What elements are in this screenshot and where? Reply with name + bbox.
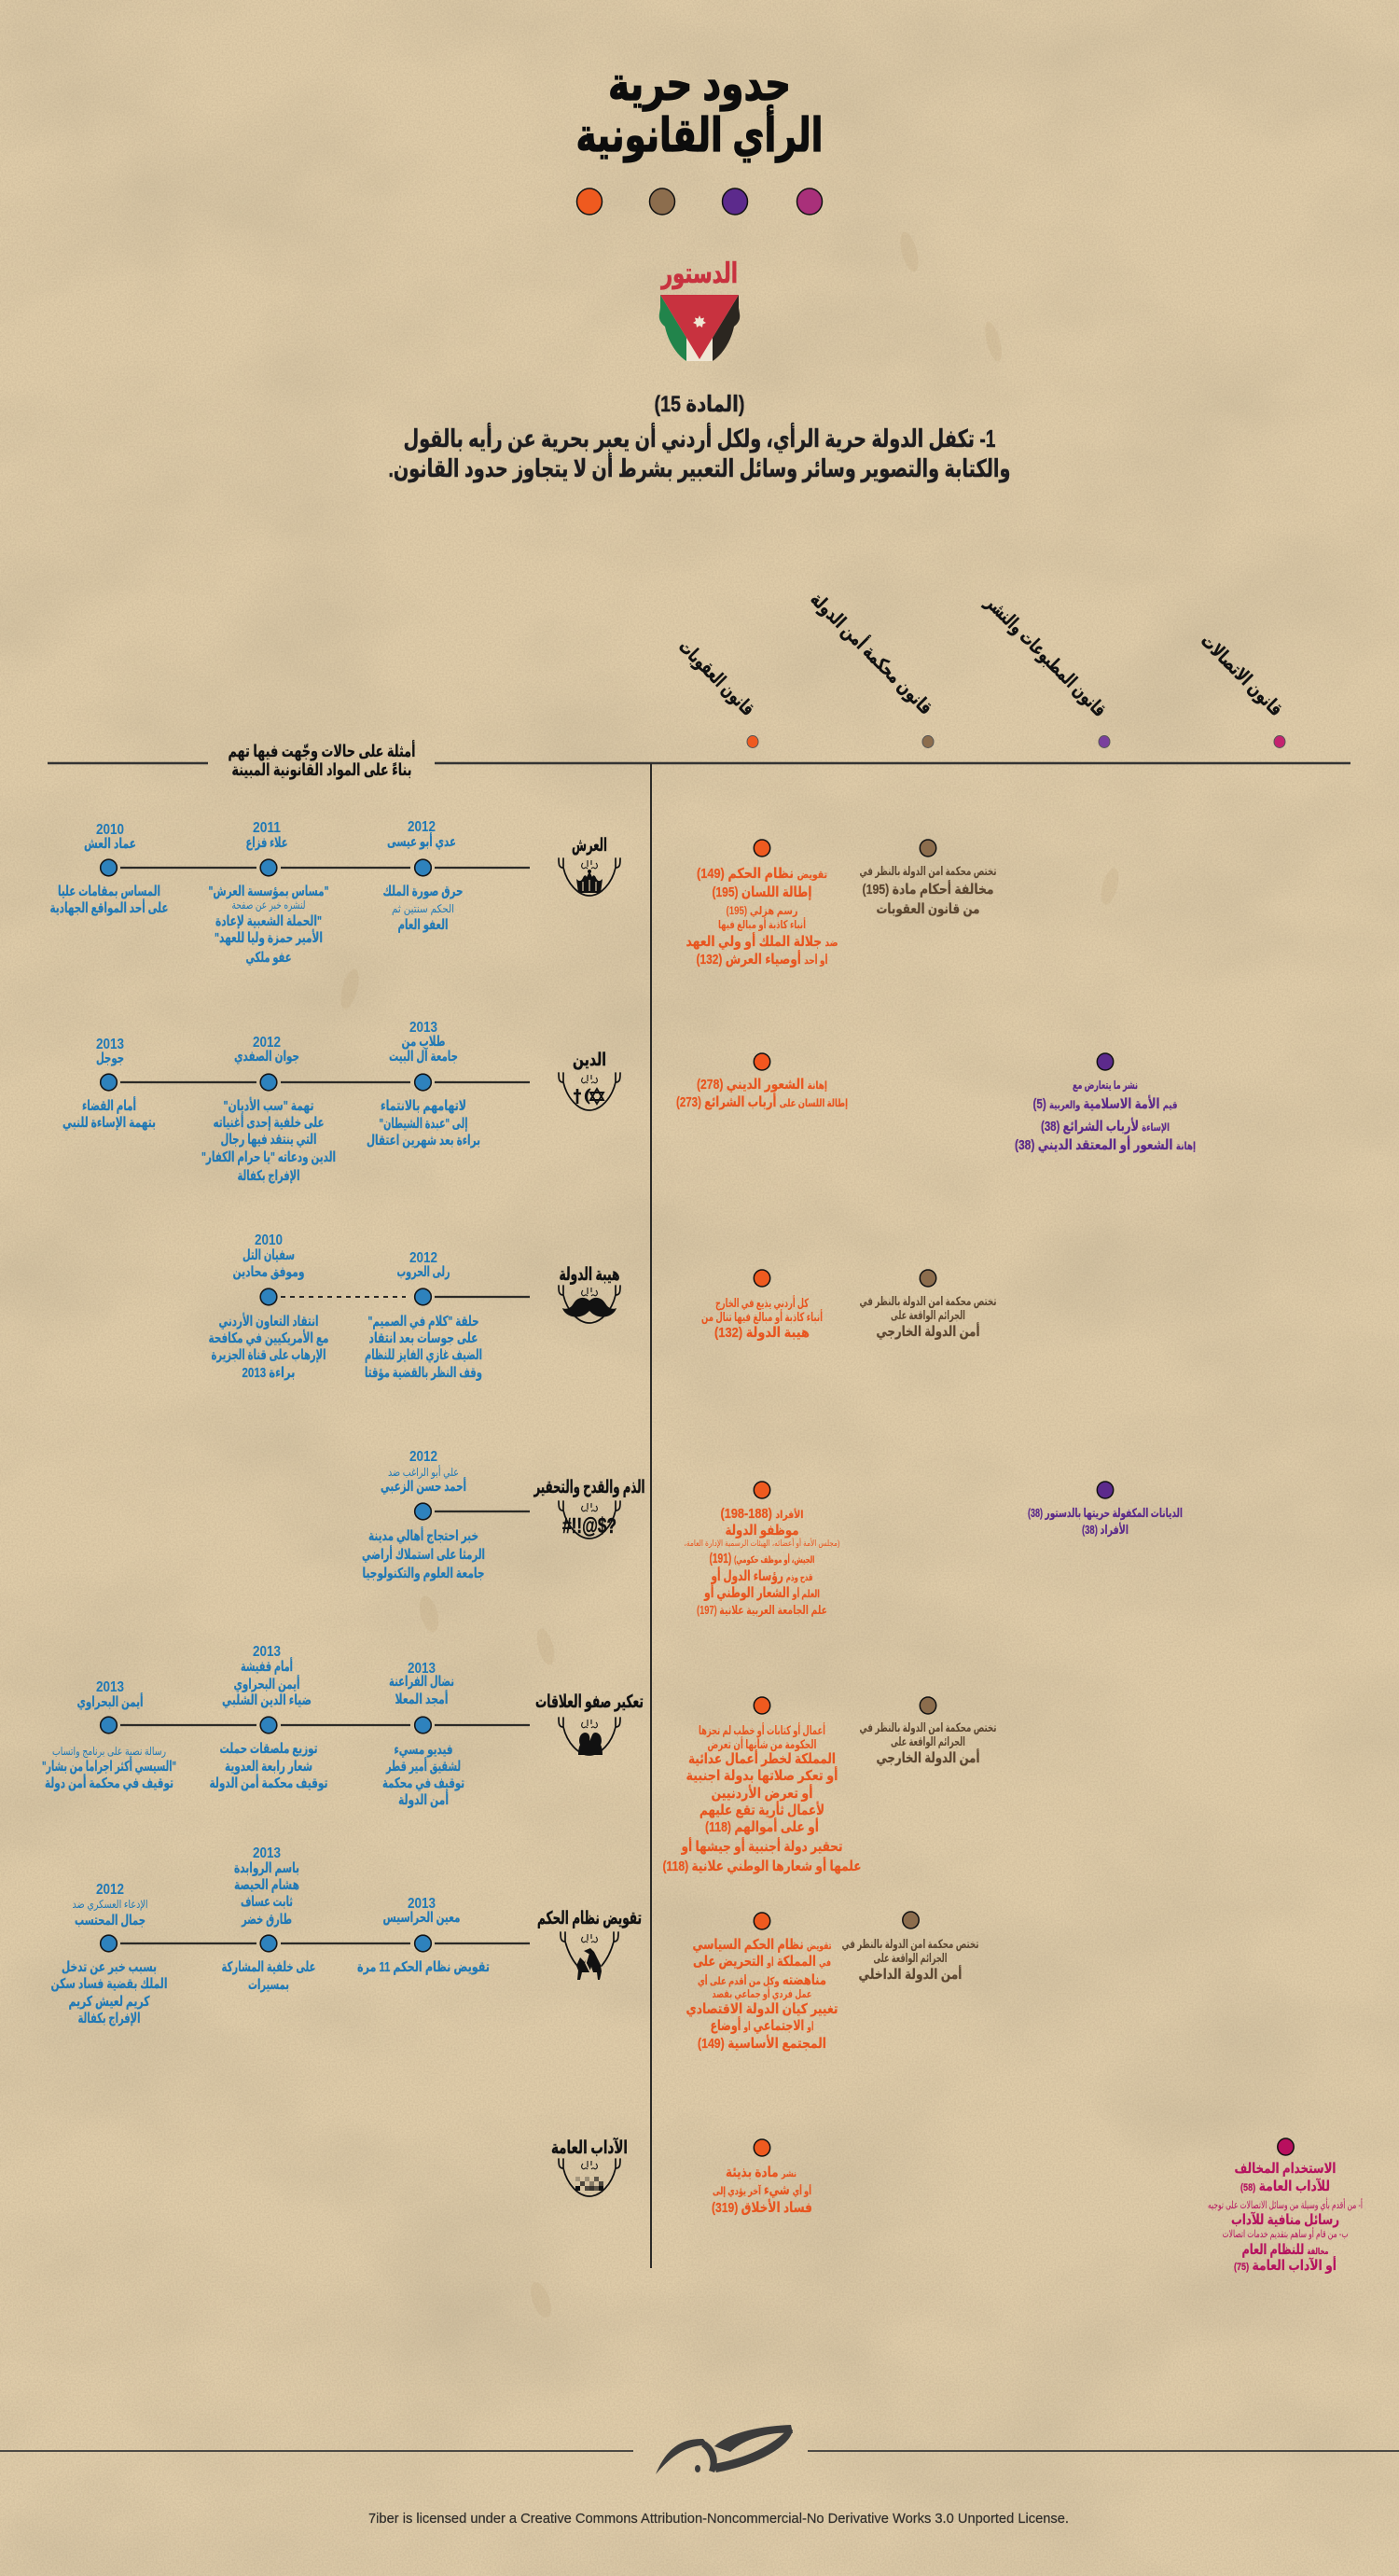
law: penal code on defamation: العلم أو الشعار الوطني أو [703, 1583, 820, 1601]
title [576, 58, 823, 163]
law: state security court on relations [860, 1697, 996, 1766]
case: Qafisha, Bahrawi, Shalabi: أمام قفيشة [241, 1657, 293, 1675]
case: Imad Al-Ash [50, 822, 168, 916]
case: Qafisha, Bahrawi, Shalabi: 2013 [253, 1644, 281, 1660]
icon: face with two silhouettes [559, 1718, 620, 1755]
timeline: undermining the regime [120, 1942, 530, 1944]
press and publications law header: قانون المطبوعات والنشر [981, 592, 1110, 721]
row: the throne [50, 819, 996, 968]
icon: face with pixelated mouth [559, 2159, 620, 2196]
case: Rula Al-Hroob [365, 1250, 482, 1381]
law: penal code on regime: أو الاجتماعي أو أوضاع [711, 2016, 814, 2034]
law: telecom law on morals: رسائل منافية للآداب [1231, 2211, 1339, 2228]
row: disturbing relations [42, 1644, 996, 1874]
examples heading: أمثلة على حالات وجّهت فيها تهم [228, 740, 416, 761]
constitution emblem [659, 258, 740, 361]
row title: religion: الدين [573, 1051, 606, 1070]
case: Sufyan Al-Tal and Muwaffaq Mahadin: مع الأمريكيين في مكافحة [209, 1330, 328, 1346]
case: Sufyan Al-Tal and Muwaffaq Mahadin: الإرهاب على قناة الجزيرة [211, 1347, 326, 1363]
case: Rawabdeh, Haisa, Assaf, Khader: باسم الروابدة [234, 1860, 299, 1876]
case: Google: جوجل [96, 1051, 124, 1066]
article 15 text: (المادة 15) [655, 392, 744, 417]
law: press law on religion: الإساءة لأرباب الشرائع (38) [1041, 1118, 1170, 1135]
law: penal code on throne [686, 840, 838, 968]
law: penal code on relations: الحكومة من شأنها أن تعرض [707, 1736, 817, 1751]
case: Rawabdeh, Haisa, Assaf, Khader: بمسيرات [248, 1977, 289, 1993]
case: Google: 2013 [96, 1037, 124, 1052]
case: Nidal Al-Faraaneh and Amjad Al-Mualla: فيديو مسيء [394, 1742, 453, 1758]
timeline: throne [120, 867, 530, 869]
law: state security court on regime: الجرائم الواقعة على [873, 1951, 948, 1965]
law: penal code on state prestige: كل أردني يذيع في الخارج [715, 1295, 809, 1311]
case: Al al-Bayt students: طلاب من [401, 1034, 446, 1050]
case: Rawabdeh, Haisa, Assaf, Khader: طارق خضر [241, 1912, 292, 1928]
examples heading: بناءً على المواد القانونية المبينة [231, 760, 412, 780]
case: Qafisha, Bahrawi, Shalabi [209, 1644, 328, 1791]
row title: disturbing relations: تعكير صفو العلاقات [535, 1692, 644, 1712]
case: Sufyan Al-Tal and Muwaffaq Mahadin: 2010 [255, 1232, 283, 1248]
case: Al al-Bayt students: جامعة آل البيت [389, 1048, 458, 1065]
law: state security court on throne: من قانون العقوبات [877, 901, 979, 917]
row title: undermining the regime: تقويض نظام الحكم [537, 1909, 642, 1929]
law: penal code on regime: تقويض نظام الحكم السياسي [692, 1937, 832, 1953]
logo: 7iber [656, 2425, 793, 2474]
case: Ahmad Hassan Al-Zoubi: الرمثا على استملاك أراضي [362, 1545, 485, 1563]
law: penal code on religion: إهانة الشعور الديني (278) [697, 1077, 827, 1093]
law: press law on religion: إهانة الشعور أو المعتقد الديني (38) [1015, 1135, 1196, 1153]
row: religion [62, 1020, 1196, 1184]
law: penal code on throne: أو أحد أوصياء العرش (132) [696, 950, 828, 968]
law: state security court on regime: تختص محكمة امن الدولة بالنظر في [841, 1937, 979, 1951]
case: Ayman Al-Bahrawi: توقيف في محكمة أمن دولة [45, 1774, 173, 1791]
case: Sufyan Al-Tal and Muwaffaq Mahadin: براءة 2013 [242, 1365, 295, 1381]
case: Ahmad Hassan Al-Zoubi: علي أبو الراغب ضد [388, 1465, 459, 1480]
case: Nidal Al-Faraaneh and Amjad Al-Mualla: توقيف في محكمة [382, 1775, 464, 1791]
case: Ayman Al-Bahrawi: أيمن البحراوي [76, 1692, 144, 1711]
law: penal code on relations: المملكة لخطر أعمال عدائية [688, 1749, 836, 1767]
law: penal code on religion: إطالة اللسان على أرباب الشرائع (273) [676, 1093, 848, 1110]
case: Jamal Al-Muhtaseb: الملك بقضية فساد سكن [50, 1976, 168, 1992]
law: penal code on relations: أو تعرض الأردنيين [711, 1784, 813, 1802]
timeline: defamation [435, 1511, 530, 1512]
case: Jamal Al-Muhtaseb: الإفراج بكفالة [78, 2011, 140, 2026]
law: state security court on regime [841, 1912, 979, 1983]
case: Ahmad Hassan Al-Zoubi: أحمد حسن الزعبي [381, 1477, 466, 1495]
law: penal code on relations: لأعمال ثأرية تقع عليهم [700, 1801, 824, 1818]
law: penal code on state prestige: أنباء كاذبة أو مبالغ فيها تنال من [701, 1309, 823, 1324]
case: Moeen Al-Harasees: معين الحراسيس [382, 1910, 461, 1926]
law: press law on religion: نشر ما يتعارض مع [1073, 1079, 1138, 1092]
timeline: religion [120, 1081, 530, 1083]
law: penal code on relations: علمها أو شعارها الوطني علانية (118) [662, 1857, 862, 1874]
law: telecom law on morals: ب- من قام أو ساهم بتقديم خدمات اتصالات [1222, 2227, 1349, 2240]
case: Uday Abu Issa: 2012 [408, 819, 436, 835]
case: Alaa Fazzaa: عفو ملكي [246, 950, 291, 966]
law: penal code on state prestige [701, 1270, 823, 1341]
law: state security court on state prestige [860, 1270, 996, 1340]
law: penal code on relations: أو على أموالهم (118) [705, 1817, 819, 1835]
case: Jamal Al-Muhtaseb: 2012 [96, 1882, 124, 1898]
case: Google: بتهمة الإساءة للنبي [62, 1115, 156, 1131]
case: Imad Al-Ash: عماد العش [84, 836, 136, 852]
case: Jowan Safadi [201, 1035, 336, 1184]
case: Nidal Al-Faraaneh and Amjad Al-Mualla: 2013 [408, 1661, 436, 1677]
case: Moeen Al-Harasees: تقويض نظام الحكم 11 مرة [357, 1959, 490, 1975]
case: Jowan Safadi: على خلفية إحدى أغنياته [213, 1113, 325, 1131]
icon: face with broken throne [561, 1932, 618, 1980]
law: penal code on defamation: الأفراد (188-198) [720, 1506, 804, 1522]
law: state security court on state prestige: تختص محكمة امن الدولة بالنظر في [860, 1294, 996, 1308]
case: Sufyan Al-Tal and Muwaffaq Mahadin: انتقاد التعاون الأردني [218, 1313, 319, 1330]
law: penal code on relations [662, 1697, 862, 1874]
case: Jamal Al-Muhtaseb: بسبب خبر عن تدخل [62, 1959, 157, 1975]
law: penal code on relations: تحقير دولة أجنبية أو جيشها أو [681, 1837, 843, 1855]
state security court law header: قانون محكمة أمن الدولة [806, 587, 938, 719]
case: Rula Al-Hroob: وقف النظر بالقضية مؤقتا [365, 1365, 482, 1381]
case: Alaa Fazzaa: الأمير حمزة وليا للعهد" [215, 929, 323, 946]
row title: defamation: الذم والقدح والتحقير [533, 1478, 645, 1497]
case: Jowan Safadi: الدين ودعاته "يا حرام الكفار" [201, 1149, 336, 1165]
law: press law on defamation [1028, 1482, 1183, 1537]
article 15 text: والكتابة والتصوير وسائر وسائل التعبير بشرط أن لا يتجاوز حدود القانون. [388, 453, 1011, 483]
law: penal code on throne: إطالة اللسان (195) [713, 884, 811, 900]
law: penal code on morals [712, 2139, 812, 2216]
law: telecom law on morals: مخالفة للنظام العام [1242, 2242, 1328, 2258]
case: Rula Al-Hroob: 2012 [409, 1250, 437, 1266]
case: Ahmad Hassan Al-Zoubi: خبر احتجاج أهالي مدينة [368, 1526, 478, 1544]
icon: face with moustache [559, 1286, 620, 1323]
law: penal code on throne: تقويض نظام الحكم (149) [697, 866, 827, 882]
law: state security court on state prestige: الجرائم الواقعة على [891, 1308, 965, 1322]
law: penal code on defamation: قدح وذم رؤساء الدول أو [711, 1566, 813, 1584]
case: Alaa Fazzaa: لنشره خبر عن صفحة [231, 898, 306, 912]
case: Ayman Al-Bahrawi: 2013 [96, 1679, 124, 1695]
case: Jamal Al-Muhtaseb: كريم لعيش كريم [69, 1994, 150, 2010]
title: الرأي القانونية [576, 104, 823, 163]
case: Ahmad Hassan Al-Zoubi: جامعة العلوم والتكنولوجيا [362, 1566, 485, 1581]
case: Rawabdeh, Haisa, Assaf, Khader: على خلفية المشاركة [222, 1959, 315, 1975]
icon: face with censored symbols [559, 1501, 620, 1539]
case: Jowan Safadi: تهمة "سب الأديان" [224, 1097, 313, 1114]
law: penal code on throne: رسم هزلي (195) [726, 904, 798, 917]
law: penal code on defamation [685, 1482, 839, 1617]
timeline: state prestige [435, 1296, 530, 1298]
row: undermining the regime [50, 1845, 979, 2052]
case: Uday Abu Issa: حرق صورة الملك [382, 884, 463, 899]
case: Ayman Al-Bahrawi [42, 1679, 176, 1791]
case: Jowan Safadi: 2012 [253, 1035, 281, 1051]
article 15 text: 1- تكفل الدولة حرية الرأي، ولكل أردني أن يعبر بحرية عن رأيه بالقول [403, 423, 996, 453]
case: Rawabdeh, Haisa, Assaf, Khader [222, 1845, 315, 1993]
law: telecom law on morals: للآداب العامة (58) [1240, 2178, 1330, 2194]
law: penal code on relations: أعمال أو كتابات أو خطب لم تجزها [699, 1722, 825, 1737]
case: Al al-Bayt students: لاتهامهم بالانتماء [381, 1098, 466, 1114]
row: public morals [551, 2137, 1363, 2274]
row title: public morals: الآداب العامة [551, 2137, 628, 2158]
law: press law on defamation: الديانات المكفولة حريتها بالدستور (38) [1028, 1506, 1183, 1520]
case: Rula Al-Hroob: الضيف غازي الفايز للنظام [365, 1347, 482, 1364]
law: state security court on relations: الجرائم الواقعة على [891, 1734, 965, 1748]
case: Nidal Al-Faraaneh and Amjad Al-Mualla: أمجد المعلا [395, 1690, 448, 1707]
law column headers [674, 587, 1286, 748]
case: Jamal Al-Muhtaseb: جمال المحتسب [75, 1913, 145, 1929]
case: Ayman Al-Bahrawi: رسالة نصية على برنامج واتساب [52, 1745, 166, 1759]
title: حدود حرية [608, 58, 791, 112]
law: state security court on regime: أمن الدولة الداخلي [858, 1965, 963, 1983]
case: Alaa Fazzaa: "الحملة الشعبية لإعادة [215, 913, 322, 929]
icon: face with censored symbols: #!!@$? [562, 1513, 616, 1538]
case: Sufyan Al-Tal and Muwaffaq Mahadin: وموفق محادين [233, 1264, 304, 1280]
row title: state prestige: هيبة الدولة [560, 1265, 619, 1285]
case: Qafisha, Bahrawi, Shalabi: ضياء الدين الشلبي [222, 1692, 312, 1708]
law: penal code on regime: المجتمع الأساسية (149) [698, 2035, 826, 2052]
case: Rawabdeh, Haisa, Assaf, Khader: هشام الحيصة [234, 1877, 299, 1893]
legend dots [576, 188, 823, 215]
law: penal code on regime: مناهضته وكل من أقدم على أي [698, 1972, 826, 1988]
case: Jamal Al-Muhtaseb [50, 1882, 168, 2026]
case: Imad Al-Ash: المساس بمقامات عليا [58, 884, 160, 899]
law: penal code on throne: أنباء كاذبة أو مبالغ فيها [718, 917, 806, 932]
law: penal code on religion [676, 1053, 848, 1110]
case: Nidal Al-Faraaneh and Amjad Al-Mualla: أمن الدولة [398, 1790, 449, 1808]
law: telecom law on morals: الاستخدام المخالف [1235, 2161, 1336, 2177]
case: Imad Al-Ash: على أحد المواقع الجهادية [50, 898, 168, 916]
case: Al al-Bayt students: 2013 [409, 1020, 437, 1036]
law: penal code on relations: أو تعكر صلاتها بدولة اجنبية [686, 1766, 838, 1784]
case: Rula Al-Hroob: رلى الحروب [397, 1264, 450, 1280]
case: Imad Al-Ash: 2010 [96, 822, 124, 838]
law: telecom law on morals: أو الآداب العامة (75) [1234, 2256, 1337, 2274]
case: Uday Abu Issa: العفو العام [397, 917, 448, 933]
case: Moeen Al-Harasees: 2013 [408, 1896, 436, 1912]
law: state security court on throne [860, 840, 996, 917]
row: prestige of the state [209, 1232, 996, 1381]
row title: throne: العرش [572, 836, 607, 856]
law: penal code on defamation: الجيش، أو موظف حكومي) (191) [709, 1551, 815, 1566]
license text: 7iber is licensed under a Creative Commons Attribution-Noncommercial-No Derivative Works 3.0 Unported License. [368, 2511, 1069, 2527]
case: Sufyan Al-Tal and Muwaffaq Mahadin [209, 1232, 328, 1381]
case: Ahmad Hassan Al-Zoubi [362, 1449, 485, 1581]
law: penal code on regime: عمل فردي أو جماعي بقصد [713, 1986, 811, 2001]
law: penal code on morals: فساد الأخلاق (319) [712, 2199, 812, 2216]
row: defamation and slander [362, 1449, 1183, 1617]
law: telecom law on morals [1208, 2138, 1363, 2274]
case: Rula Al-Hroob: على جوسات بعد انتقاد [369, 1330, 478, 1346]
case: Alaa Fazzaa: "مساس بمؤسسة العرش" [209, 884, 328, 899]
case: Nidal Al-Faraaneh and Amjad Al-Mualla: نضال الفراعنة [389, 1674, 454, 1690]
case: Jowan Safadi: التي ينتقد فيها رجال [220, 1132, 317, 1148]
case: Jowan Safadi: جوان الصفدي [234, 1049, 299, 1065]
case: Rula Al-Hroob: حلقة "كلام في الصميم" [367, 1314, 479, 1330]
icon: face with religious symbols [559, 1073, 620, 1110]
case: Qafisha, Bahrawi, Shalabi: شعار رابعة العدوية [225, 1759, 312, 1775]
case: Uday Abu Issa [382, 819, 463, 933]
timeline: disturbing relations [120, 1724, 530, 1726]
case: Alaa Fazzaa: 2011 [253, 820, 281, 836]
case: Moeen Al-Harasees [357, 1896, 490, 1975]
law: penal code on morals: أو أي شيء آخر يؤدي إلى [713, 2182, 811, 2198]
case: Rawabdeh, Haisa, Assaf, Khader: 2013 [253, 1845, 281, 1861]
case: Al al-Bayt students: براءة بعد شهرين اعتقال [367, 1133, 480, 1149]
case: Alaa Fazzaa [209, 820, 328, 966]
case: Uday Abu Issa: الحكم سنتين ثم [392, 902, 454, 916]
case: Google: أمام القضاء [82, 1096, 136, 1114]
law: state security court on throne: مخالفة أحكام مادة (195) [862, 880, 994, 898]
law: press law on religion: قيم الأمة الاسلامية والعربية (5) [1033, 1095, 1177, 1112]
case: Uday Abu Issa: عدي أبو عيسى [387, 832, 456, 851]
article 15 text [388, 392, 1011, 483]
case: Qafisha, Bahrawi, Shalabi: توزيع ملصقات حملت [220, 1741, 317, 1757]
telecom law header: قانون الاتصالات [1197, 631, 1286, 720]
case: Alaa Fazzaa: علاء فزاع [246, 835, 287, 851]
law: penal code on defamation: (مجلس الأمة أو أعضائه، الهيئات الرسمية الإدارة العامة، [685, 1538, 839, 1549]
case: Google [62, 1037, 156, 1131]
law: penal code on morals: نشر مادة بذيئة [726, 2165, 796, 2180]
case: Al al-Bayt students: إلى "عبدة الشيطان" [379, 1116, 468, 1132]
case: Nidal Al-Faraaneh and Amjad Al-Mualla [382, 1661, 464, 1808]
constitution emblem: الدستور [660, 258, 738, 289]
case: Qafisha, Bahrawi, Shalabi: أيمن البحراوي [233, 1675, 300, 1693]
law: state security court on relations: تختص محكمة امن الدولة بالنظر في [860, 1720, 996, 1734]
case: Jamal Al-Muhtaseb: الإدعاء العسكري ضد [73, 1898, 147, 1912]
law: penal code on state prestige: هيبة الدولة (132) [714, 1325, 810, 1341]
law: state security court on throne: تختص محكمة امن الدولة بالنظر في [860, 864, 996, 878]
law: penal code on defamation: موظفو الدولة [726, 1523, 798, 1539]
law: state security court on relations: أمن الدولة الخارجي [877, 1748, 979, 1766]
examples heading [228, 740, 416, 780]
law: press law on defamation: الأفراد (38) [1082, 1522, 1129, 1537]
law: penal code on regime: في المملكة أو التحريض على [693, 1954, 831, 1970]
case: Ahmad Hassan Al-Zoubi: 2012 [409, 1449, 437, 1465]
case: Rawabdeh, Haisa, Assaf, Khader: ثابت عساف [241, 1894, 293, 1910]
press and publications law header [981, 592, 1110, 748]
footer rule [0, 2450, 1399, 2452]
law: press law on religion [1015, 1053, 1196, 1153]
penal code header: قانون العقوبات [674, 636, 758, 720]
law: penal code on regime: تغيير كيان الدولة الاقتصادي [686, 2001, 838, 2018]
case: Ayman Al-Bahrawi: "السيسي أكثر اجراما من بشار" [42, 1757, 176, 1775]
law: penal code on defamation: علم الجامعة العربية علانية (197) [697, 1603, 827, 1617]
law: penal code on regime [686, 1913, 838, 2052]
case: Qafisha, Bahrawi, Shalabi: توقيف محكمة أمن الدولة [209, 1774, 328, 1791]
case: Nidal Al-Faraaneh and Amjad Al-Mualla: لشقيق أمير قطر [385, 1757, 461, 1775]
law: penal code on throne: ضد جلالة الملك أو ولي العهد [686, 932, 838, 950]
axis lines [48, 763, 1351, 2268]
law: state security court on state prestige: أمن الدولة الخارجي [877, 1322, 979, 1340]
icon: face with crown [559, 858, 620, 896]
case: Sufyan Al-Tal and Muwaffaq Mahadin: سفيان التل [242, 1247, 295, 1263]
case: Jowan Safadi: الإفراج بكفالة [237, 1168, 300, 1184]
case: Al al-Bayt students [367, 1020, 480, 1149]
